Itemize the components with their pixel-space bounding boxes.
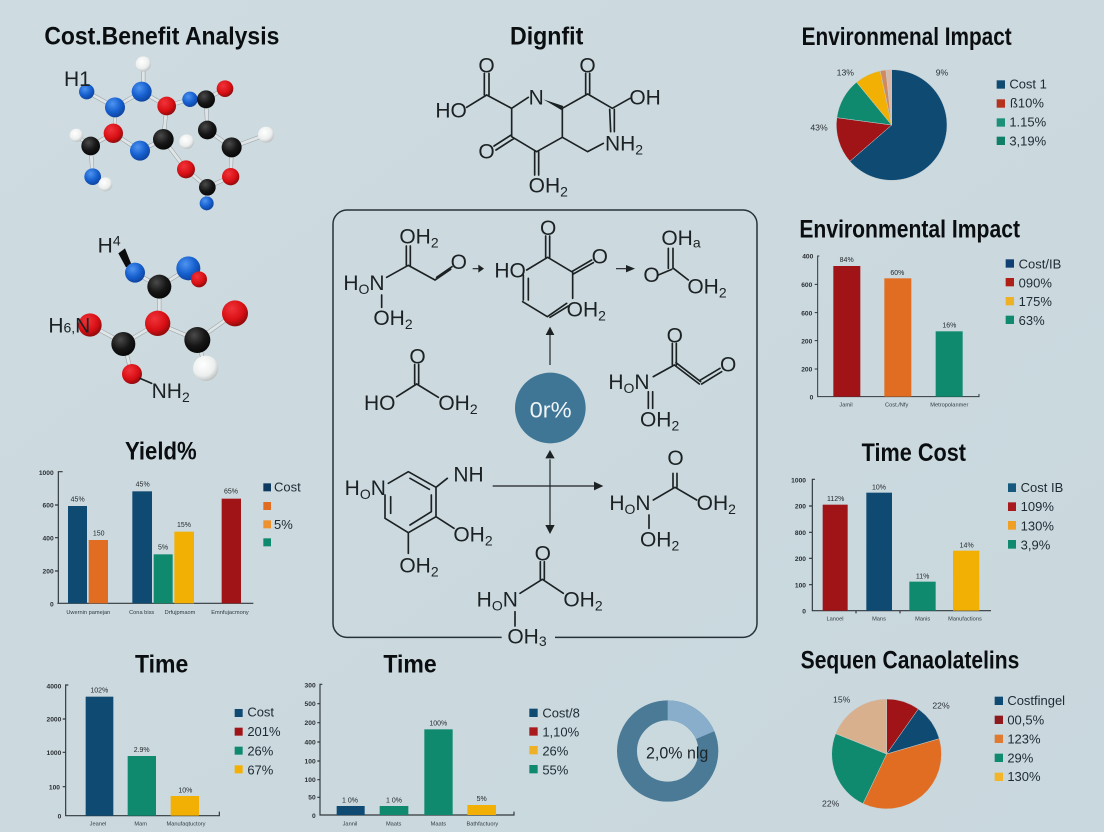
legend: 26% xyxy=(542,744,569,759)
donut chart: 2,0% nlg xyxy=(646,743,708,762)
bar chart: yield: Drfujpmaom xyxy=(165,610,196,616)
molecule top left: 2 xyxy=(405,316,413,332)
ball and stick molecule 1: H1 xyxy=(64,68,91,91)
molecule middle right xyxy=(608,325,736,434)
central circle 0r% xyxy=(515,373,586,443)
legend: Cost/IB xyxy=(1019,256,1061,271)
bar chart: 600 xyxy=(801,282,813,289)
molecule top centre: O xyxy=(540,217,556,240)
molecule bottom: 2 xyxy=(595,598,603,614)
bar chart: time left: 102% xyxy=(90,688,108,695)
molecule middle right: OH xyxy=(640,409,671,432)
molecule top left xyxy=(343,225,467,332)
bar chart: time cost: Lanoel xyxy=(826,617,843,623)
molecule bottom: 3 xyxy=(539,633,547,649)
ball and stick molecule 1 xyxy=(64,56,274,210)
bar chart: 400 xyxy=(802,254,814,261)
bar chart: yield: Emnfujacmony xyxy=(211,610,249,616)
title: Time: Time xyxy=(383,652,437,679)
legend: 29% xyxy=(1007,750,1034,765)
rounded frame xyxy=(333,210,757,637)
bar chart: Jamil xyxy=(839,403,853,409)
bar chart: time left: 1000 xyxy=(47,750,62,757)
bar chart: time middle: 100 xyxy=(305,758,316,765)
structural formula: O xyxy=(478,140,495,163)
molecule lower left ring xyxy=(345,464,493,580)
molecule middle right: N xyxy=(634,371,650,394)
molecule top right: a xyxy=(693,235,701,251)
bar chart: yield: 150 xyxy=(93,530,105,537)
bar chart: time cost: 11% xyxy=(916,574,929,581)
molecule middle right: 2 xyxy=(671,418,679,434)
molecule top left: O xyxy=(358,281,369,297)
bar chart: time cost: 0 xyxy=(802,609,806,616)
legend: Costfingel xyxy=(1007,693,1065,708)
bar chart: yield: 45% xyxy=(136,481,150,488)
bar chart: time left: 10% xyxy=(178,787,192,794)
panel: central reaction scheme xyxy=(333,210,757,649)
structural formula: 2 xyxy=(560,184,568,200)
bar chart: 16% xyxy=(942,322,956,329)
pie chart: 13% xyxy=(837,68,854,78)
legend xyxy=(997,76,1047,148)
bar chart: 60% xyxy=(890,270,904,277)
structural formula: 2 xyxy=(635,142,643,158)
molecule middle right: H xyxy=(608,371,623,394)
structural formula: NH xyxy=(605,133,635,156)
legend: 1.15% xyxy=(1009,115,1047,130)
molecule top right: OH xyxy=(661,227,693,250)
panel: cost-benefit analysis molecules xyxy=(44,24,279,405)
bar chart: 200 xyxy=(801,338,813,345)
bar chart: 600 xyxy=(801,310,813,317)
molecule top centre: OH xyxy=(567,299,598,322)
bar chart: time middle: Jannil xyxy=(343,822,357,828)
molecule lower left ring: N xyxy=(371,477,386,500)
bar chart: time cost: 112% xyxy=(827,496,844,503)
legend: 175% xyxy=(1019,294,1052,309)
molecule bottom: OH xyxy=(563,589,595,612)
bar chart xyxy=(801,254,979,409)
molecule lower left ring: OH xyxy=(399,555,431,578)
legend: 67% xyxy=(247,762,274,777)
legend xyxy=(1006,256,1061,328)
legend: Cost xyxy=(274,480,301,495)
bar chart: time cost: Manufactions xyxy=(948,617,982,623)
bar chart: Cost./Nfy xyxy=(885,403,908,409)
molecule bottom: H xyxy=(477,589,492,612)
legend: 201% xyxy=(247,724,281,739)
legend xyxy=(235,705,281,777)
pie chart xyxy=(822,695,950,809)
bar chart: time cost: Manis xyxy=(915,617,930,623)
bar chart: Metropolanmer xyxy=(930,403,968,409)
legend: 3,19% xyxy=(1009,133,1047,148)
bar chart: yield: 0 xyxy=(50,602,54,609)
bar chart: time left: 2000 xyxy=(47,717,62,724)
legend: Cost IB xyxy=(1021,480,1063,495)
bar chart: time cost: 200 xyxy=(795,556,806,563)
panel: time cost and sequence charts xyxy=(791,440,1065,809)
molecule top left: O xyxy=(451,251,467,274)
molecule lower left ring: OH xyxy=(453,524,485,547)
bar chart: time left: Manufaqtuctory xyxy=(166,822,206,828)
molecule bottom: OH xyxy=(507,625,539,648)
molecule top left: N xyxy=(369,272,385,295)
molecule top centre xyxy=(494,217,608,324)
molecule top left: OH xyxy=(373,307,405,330)
bar chart: yield: 45% xyxy=(71,496,85,503)
molecule bottom: O xyxy=(492,598,503,614)
bar chart: time cost: 200 xyxy=(795,504,806,511)
panel: Dignfit structure xyxy=(435,23,661,200)
title: Sequen Canaolatelins: Sequen Canaolatelins xyxy=(801,647,1019,674)
molecule lower right xyxy=(609,447,736,554)
bar chart: time middle: 500 xyxy=(305,701,316,708)
ball and stick molecule 2: 4 xyxy=(113,232,121,248)
structural formula: N xyxy=(529,86,544,109)
bar chart: time middle: 100 xyxy=(305,777,316,784)
molecule top left: OH xyxy=(399,225,431,248)
molecule top right: 2 xyxy=(719,284,727,300)
bar chart: time middle: 400 xyxy=(305,739,316,746)
bar chart: time left: 4000 xyxy=(47,683,62,690)
legend xyxy=(263,480,301,546)
bar chart: time cost: 10% xyxy=(872,484,886,491)
legend: 109% xyxy=(1021,499,1054,514)
molecule top centre: O xyxy=(592,245,608,268)
molecule top left: H xyxy=(343,272,358,295)
panel: environmental impact pie xyxy=(799,24,1061,409)
legend xyxy=(995,693,1065,784)
legend: 5% xyxy=(274,517,293,532)
bar chart: time middle: 300 xyxy=(305,683,316,690)
bar chart: time middle: Maats xyxy=(386,822,402,828)
molecule lower right: O xyxy=(624,501,635,517)
pie chart: 22% xyxy=(822,798,840,808)
panel: yield and time charts xyxy=(39,438,301,828)
molecule lower right: OH xyxy=(640,529,671,552)
legend xyxy=(529,706,580,777)
molecule top right xyxy=(643,227,727,300)
molecule top centre: 2 xyxy=(598,308,606,324)
molecule middle left xyxy=(364,345,478,417)
molecule lower right: 2 xyxy=(728,501,736,517)
bar chart: yield: 65% xyxy=(224,488,238,495)
molecule top centre: HO xyxy=(494,259,526,282)
ball and stick molecule 2: 2 xyxy=(182,389,190,405)
molecule middle right: O xyxy=(720,354,736,377)
structural formula: OH xyxy=(629,86,661,109)
bar chart: time left xyxy=(47,683,219,828)
structural formula: O xyxy=(478,55,495,78)
bar chart: time middle: Bathfactuory xyxy=(466,822,498,828)
bar chart: time cost: 1000 xyxy=(791,478,806,485)
legend: 3,9% xyxy=(1021,537,1051,552)
bar chart: yield xyxy=(39,470,253,616)
legend: 00,5% xyxy=(1007,712,1045,727)
molecule bottom: O xyxy=(535,543,551,566)
legend: 090% xyxy=(1019,275,1052,290)
molecule lower right: O xyxy=(667,447,684,470)
bar chart: yield: 400 xyxy=(43,535,54,542)
legend: 130% xyxy=(1007,769,1041,784)
bar chart: yield: 1000 xyxy=(39,470,54,477)
molecule top right: OH xyxy=(687,275,719,298)
molecule middle left: 2 xyxy=(470,401,478,417)
bar chart: time left: 100 xyxy=(49,784,60,791)
molecule middle left: HO xyxy=(364,392,395,415)
bar chart: yield: 15% xyxy=(177,522,191,529)
bar chart: yield: Cona biss xyxy=(129,610,154,616)
panel: time chart and donut xyxy=(305,652,714,828)
molecule lower right: N xyxy=(635,492,651,515)
title: Yield%: Yield% xyxy=(125,438,197,465)
bar chart: time middle xyxy=(305,683,514,828)
bar chart: 200 xyxy=(801,367,813,374)
bar chart: time cost: 800 xyxy=(795,530,806,537)
bar chart: time cost xyxy=(791,478,991,623)
molecule middle right: O xyxy=(623,380,634,396)
legend: 63% xyxy=(1019,313,1045,328)
pie chart xyxy=(810,68,949,180)
pie chart: 9% xyxy=(936,68,949,78)
bar chart: time middle: Maats xyxy=(431,822,446,828)
bar chart: time left: 0 xyxy=(58,814,62,821)
molecule middle right: O xyxy=(667,325,683,348)
legend: Cost 1 xyxy=(1009,76,1047,91)
structural formula xyxy=(435,55,661,200)
pie chart: 15% xyxy=(833,695,851,705)
title: Environmental Impact: Environmental Impact xyxy=(799,216,1020,243)
ball and stick molecule 2: NH xyxy=(152,380,182,403)
title: Environmenal Impact: Environmenal Impact xyxy=(802,24,1012,51)
bar chart: time middle: 0 xyxy=(312,813,316,820)
legend: Cost xyxy=(247,705,274,720)
pie chart: 22% xyxy=(932,701,950,711)
legend: ß10% xyxy=(1010,95,1044,110)
bar chart: time cost: Mans xyxy=(872,617,886,623)
bar chart: 84% xyxy=(840,257,854,264)
molecule lower right: OH xyxy=(697,492,728,515)
molecule lower right: 2 xyxy=(671,538,679,554)
ball and stick molecule 2: H6,N xyxy=(48,314,90,337)
molecule lower left ring: 2 xyxy=(485,533,493,549)
legend: 55% xyxy=(542,762,569,777)
bar chart: yield: 200 xyxy=(43,569,54,576)
arrows xyxy=(473,265,635,534)
legend xyxy=(1008,480,1063,552)
bar chart: yield: 5% xyxy=(158,545,168,552)
bar chart: time middle: 1 0% xyxy=(342,797,358,804)
donut chart xyxy=(627,700,714,792)
bar chart: time middle: 5% xyxy=(477,796,487,803)
bar chart: time middle: 50 xyxy=(308,795,316,802)
bar chart: yield: Uwernin pamejan xyxy=(66,610,110,616)
legend: 1,10% xyxy=(542,725,580,740)
title: Dignfit: Dignfit xyxy=(510,23,583,50)
molecule middle left: OH xyxy=(438,392,470,415)
molecule bottom: N xyxy=(503,589,518,612)
legend: 123% xyxy=(1007,731,1041,746)
molecule top left: 2 xyxy=(431,234,439,250)
molecule lower right: H xyxy=(609,492,624,515)
bar chart: time left: 2.9% xyxy=(134,747,150,754)
molecule middle left: O xyxy=(409,345,426,368)
ball and stick molecule 2: H xyxy=(98,235,113,258)
legend: 130% xyxy=(1021,519,1054,534)
title: Time: Time xyxy=(135,652,188,679)
bar chart: time middle: 200 xyxy=(305,720,316,727)
title: Time Cost: Time Cost xyxy=(862,440,966,467)
molecule lower left ring: H xyxy=(345,477,360,500)
structural formula: OH xyxy=(529,175,560,198)
title: Cost.Benefit Analysis: Cost.Benefit Analysis xyxy=(44,24,279,51)
bar chart: time middle: 1 0% xyxy=(386,797,402,804)
central circle 0r%: 0r% xyxy=(530,397,572,422)
bar chart: 0 xyxy=(810,394,814,401)
bar chart: yield: 600 xyxy=(43,503,54,510)
structural formula: O xyxy=(579,55,596,78)
molecule lower left ring: NH xyxy=(453,464,484,487)
legend: Cost/8 xyxy=(542,706,580,721)
ball and stick molecule 2 xyxy=(48,232,248,405)
bar chart: time cost: 14% xyxy=(960,542,974,549)
molecule bottom xyxy=(477,543,603,649)
bar chart: time middle: 100% xyxy=(429,721,447,728)
molecule top right: O xyxy=(643,264,660,287)
molecule lower left ring: 2 xyxy=(431,564,439,580)
legend: 26% xyxy=(247,743,274,758)
bar chart: time cost: 100 xyxy=(795,582,806,589)
structural formula: HO xyxy=(435,99,467,122)
bar chart: time left: Mam xyxy=(134,822,147,828)
molecule lower left ring: O xyxy=(360,486,371,502)
pie chart: 43% xyxy=(810,123,828,133)
bar chart: time left: Jeanel xyxy=(90,822,106,828)
